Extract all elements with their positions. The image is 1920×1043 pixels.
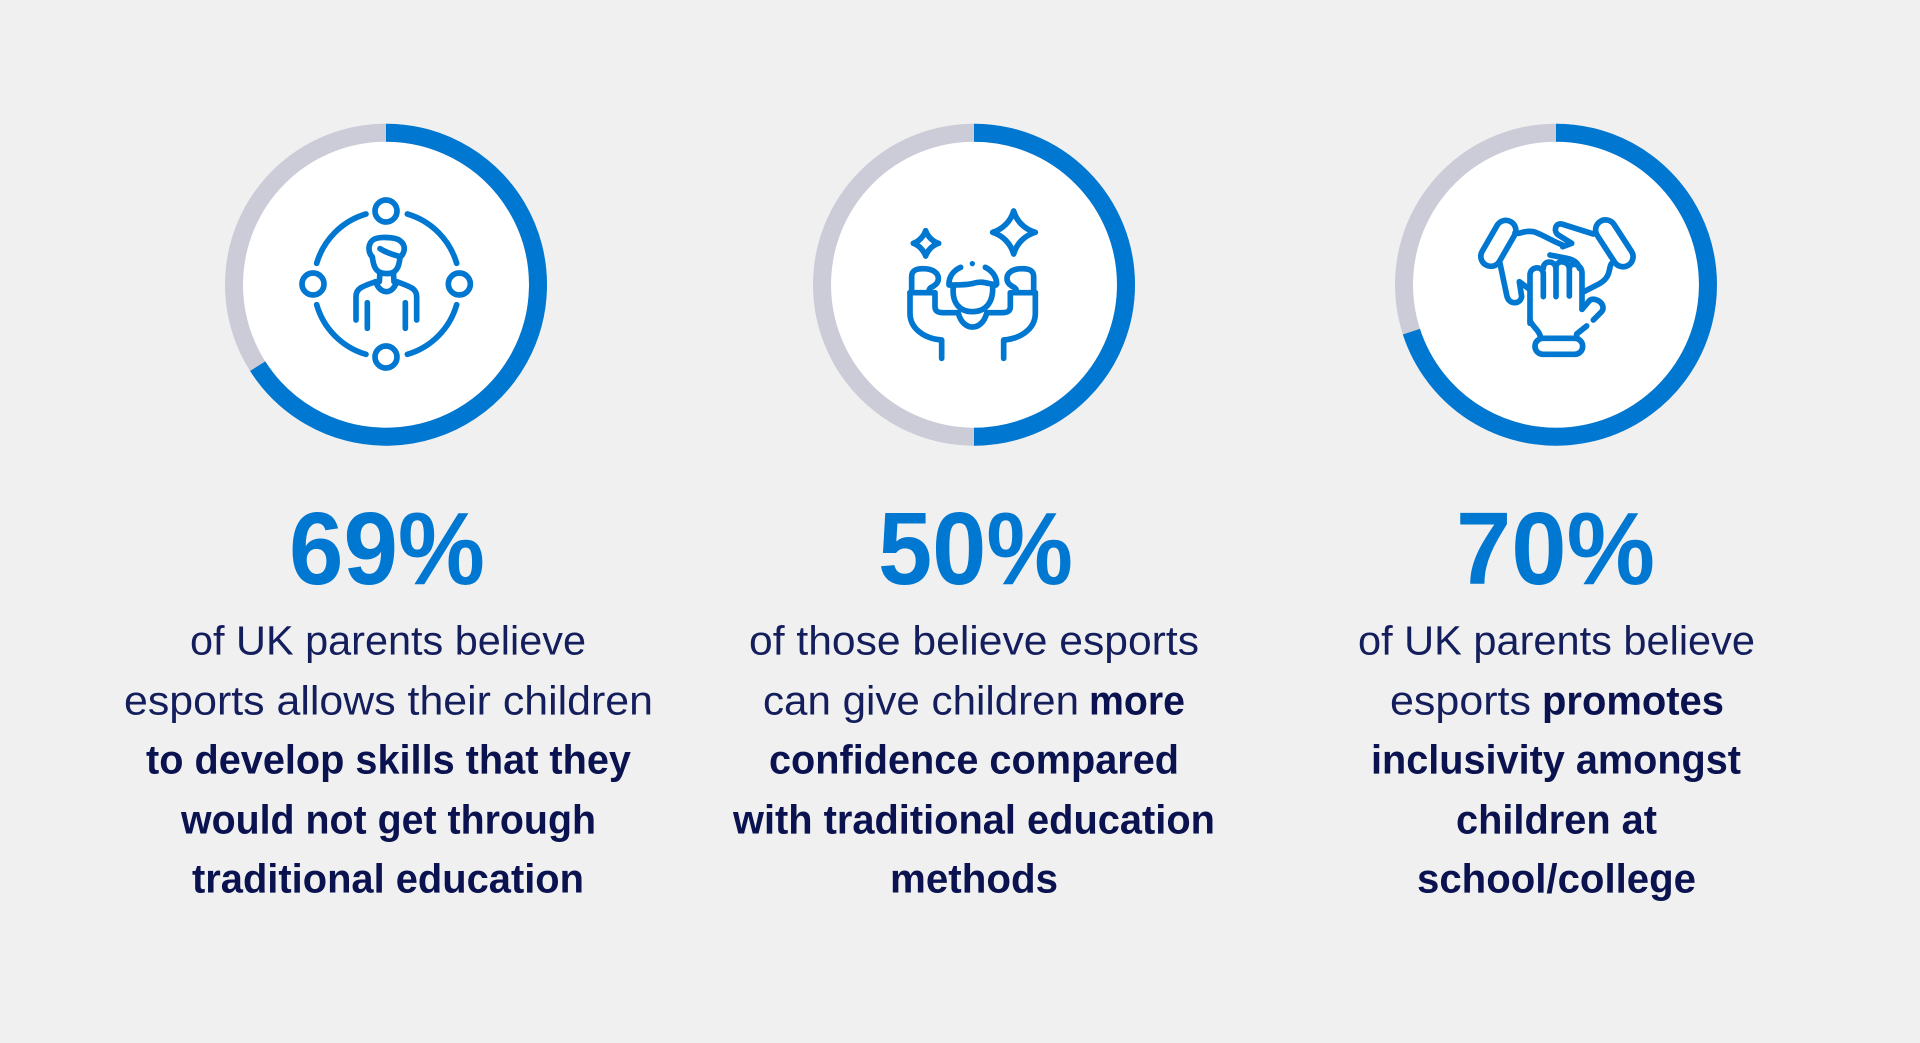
- progress ring: 69%: [234, 133, 538, 437]
- icon: cheering person with sparkles: [910, 211, 1035, 358]
- text block: inclusivity description: esports: [1390, 678, 1531, 724]
- text block: confidence description: [732, 618, 1215, 902]
- text block: inclusivity description: children at: [1456, 796, 1657, 842]
- text block: skills description: esports allows their children: [124, 678, 653, 724]
- panel: 69 percent skills: [124, 133, 653, 901]
- text block: inclusivity description: promotes: [1542, 678, 1724, 724]
- text block: inclusivity description: inclusivity amongst: [1371, 736, 1741, 782]
- text block: confidence description: can give children: [763, 678, 1079, 724]
- text block: skills description: traditional education: [192, 856, 584, 902]
- text block: confidence description: methods: [890, 856, 1058, 902]
- icon: three hands stacked: [1477, 216, 1637, 354]
- stat: 70%: 70%: [1456, 491, 1655, 606]
- progress ring: 70%: [1404, 133, 1708, 437]
- text block: confidence description: of those believe esports: [749, 618, 1199, 664]
- text block: inclusivity description: of UK parents believe: [1358, 618, 1755, 664]
- text block: skills description: would not get through: [180, 796, 596, 842]
- text block: skills description: [124, 618, 653, 902]
- panel: 50 percent confidence: [732, 133, 1215, 901]
- text block: skills description: to develop skills that they: [146, 736, 631, 782]
- progress ring: 50%: [822, 133, 1126, 437]
- text block: inclusivity description: [1358, 618, 1755, 902]
- text block: confidence description: more: [1089, 678, 1185, 724]
- stat: 69%: 69%: [289, 491, 485, 606]
- text block: inclusivity description: school/college: [1417, 856, 1696, 902]
- icon: person surrounded by connected circles: [302, 200, 470, 368]
- stat: 50%: 50%: [878, 491, 1073, 606]
- text block: confidence description: with traditional education: [732, 796, 1215, 842]
- text block: skills description: of UK parents believe: [190, 618, 586, 664]
- text block: confidence description: confidence compared: [769, 736, 1179, 782]
- panel: 70 percent inclusivity: [1358, 133, 1755, 901]
